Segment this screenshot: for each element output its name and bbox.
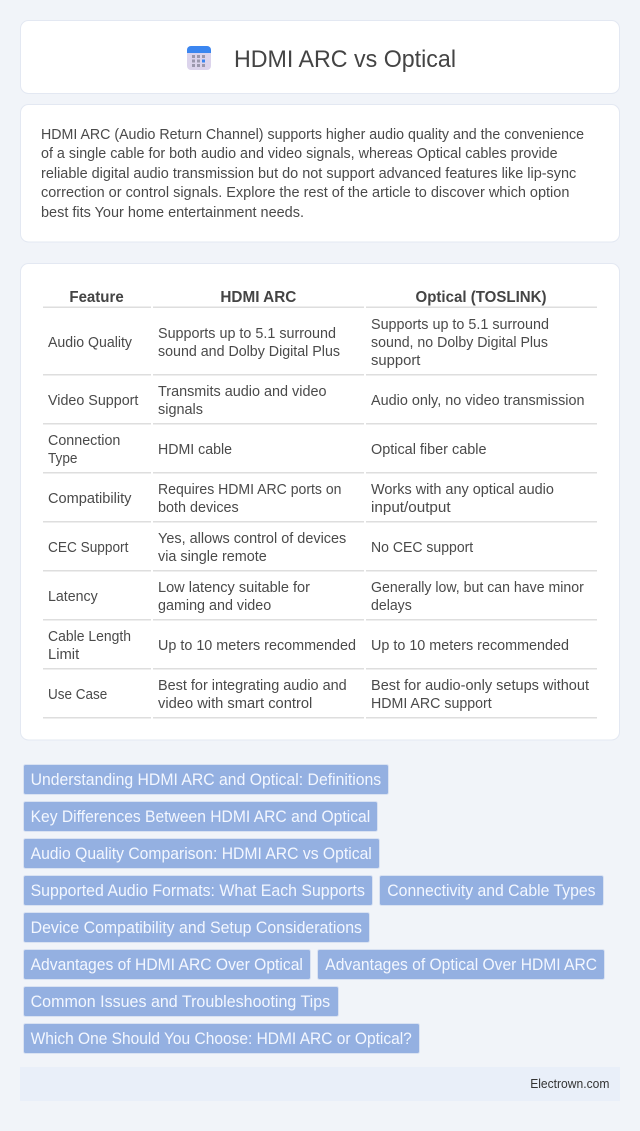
tag: device compatibility xyxy=(24,912,370,942)
table header row xyxy=(43,289,597,308)
footer xyxy=(20,1067,620,1101)
row: video support: signals xyxy=(158,402,203,418)
row: video support: Transmits audio and video xyxy=(158,384,326,400)
summary text: reliable digital audio transmission but do not support advanced features like lip-sync xyxy=(41,166,576,182)
tag: audio quality comparison xyxy=(24,838,380,868)
row: audio quality: support xyxy=(371,353,420,369)
tag: advantages of hdmi arc: Advantages of HDMI ARC Over Optical xyxy=(31,956,303,974)
summary text: of a single cable for both audio and video signals, whereas Optical cables provide xyxy=(41,146,558,162)
row: latency: Generally low, but can have minor xyxy=(371,580,584,596)
row: cec support: No CEC support xyxy=(371,540,473,556)
row: cec support: Yes, allows control of devices xyxy=(158,531,346,547)
row: connection type: HDMI cable xyxy=(158,442,232,458)
row: cable length limit: Limit xyxy=(48,647,79,663)
row: compatibility: Works with any optical audio xyxy=(371,482,554,498)
row: cable length limit: Up to 10 meters recommended xyxy=(158,638,356,654)
tag: which to choose xyxy=(24,1024,420,1054)
row: audio quality xyxy=(43,317,597,376)
row: connection type: Optical fiber cable xyxy=(371,442,486,458)
row: use case: Use Case xyxy=(48,687,107,703)
row: compatibility: Compatibility xyxy=(48,491,132,507)
tag: supported audio formats: Supported Audio Formats: What Each Supports xyxy=(31,882,365,900)
row: compatibility xyxy=(43,482,597,522)
row: connection type: Type xyxy=(48,451,78,467)
tag: troubleshooting: Common Issues and Troubleshooting Tips xyxy=(31,993,330,1011)
row: use case: video with smart control xyxy=(158,696,312,712)
row: cec support xyxy=(43,531,597,572)
row: latency: delays xyxy=(371,598,412,614)
row: use case: Best for integrating audio and xyxy=(158,678,347,694)
panel: comparison table xyxy=(20,264,620,740)
tag: advantages of optical: Advantages of Optical Over HDMI ARC xyxy=(325,956,597,974)
tag: connectivity xyxy=(380,876,604,906)
tag: key differences: Key Differences Between HDMI ARC and Optical xyxy=(31,808,370,826)
row: cable length limit xyxy=(43,629,597,670)
row: audio quality: Supports up to 5.1 surround xyxy=(158,326,336,342)
row: compatibility: both devices xyxy=(158,500,239,516)
summary text xyxy=(41,127,584,221)
tag: which to choose: Which One Should You Choose: HDMI ARC or Optical? xyxy=(31,1030,412,1048)
panel: summary xyxy=(20,104,620,242)
tag: advantages of hdmi arc xyxy=(24,950,310,980)
row: use case: Best for audio-only setups without xyxy=(371,678,589,694)
row: latency xyxy=(43,580,597,620)
table header row: Feature xyxy=(69,289,124,306)
tag: audio quality comparison: Audio Quality Comparison: HDMI ARC vs Optical xyxy=(31,845,372,863)
row: latency: Low latency suitable for xyxy=(158,580,310,596)
row: use case xyxy=(43,678,597,718)
tag: key differences xyxy=(24,802,378,832)
table header row: HDMI ARC xyxy=(220,289,297,306)
row: video support: Audio only, no video transmission xyxy=(371,393,584,409)
row: audio quality: sound and Dolby Digital Plus xyxy=(158,344,340,360)
row: video support xyxy=(43,384,597,424)
row: audio quality: Supports up to 5.1 surround xyxy=(371,317,549,333)
row: audio quality: sound, no Dolby Digital Plus xyxy=(371,335,548,351)
tag: supported audio formats xyxy=(24,876,372,906)
panel: header xyxy=(20,20,620,94)
table header row: Optical (TOSLINK) xyxy=(416,289,546,306)
icon: calendar xyxy=(187,46,211,70)
row: audio quality: Audio Quality xyxy=(48,335,133,351)
row: video support: Video Support xyxy=(48,393,138,409)
tag: advantages of optical xyxy=(318,950,604,980)
row: compatibility: Requires HDMI ARC ports on xyxy=(158,482,342,498)
tag: connectivity: Connectivity and Cable Types xyxy=(387,882,596,900)
tag: definitions: Understanding HDMI ARC and Optical: Definitions xyxy=(31,771,381,789)
summary text: correction or control signals. Explore the rest of the article to discover which option xyxy=(41,185,569,201)
row: cec support: via single remote xyxy=(158,549,267,565)
row: use case: HDMI ARC support xyxy=(371,696,492,712)
row: cable length limit: Up to 10 meters recommended xyxy=(371,638,569,654)
row: connection type xyxy=(43,433,597,474)
row: latency: Latency xyxy=(48,589,98,605)
tag: troubleshooting xyxy=(24,986,338,1016)
summary text: HDMI ARC (Audio Return Channel) supports higher audio quality and the convenience xyxy=(41,127,584,143)
footer: Electrown.com xyxy=(530,1076,609,1091)
row: cable length limit: Cable Length xyxy=(48,629,131,645)
row: cec support: CEC Support xyxy=(48,540,128,556)
row: latency: gaming and video xyxy=(158,598,271,614)
tag: device compatibility: Device Compatibility and Setup Considerations xyxy=(31,919,362,937)
tag: definitions xyxy=(24,764,388,794)
row: connection type: Connection xyxy=(48,433,120,449)
row: compatibility: input/output xyxy=(371,500,451,516)
summary text: best fits Your home entertainment needs. xyxy=(41,205,304,221)
title: HDMI ARC vs Optical xyxy=(234,46,456,73)
panel: section tags xyxy=(24,764,604,1054)
